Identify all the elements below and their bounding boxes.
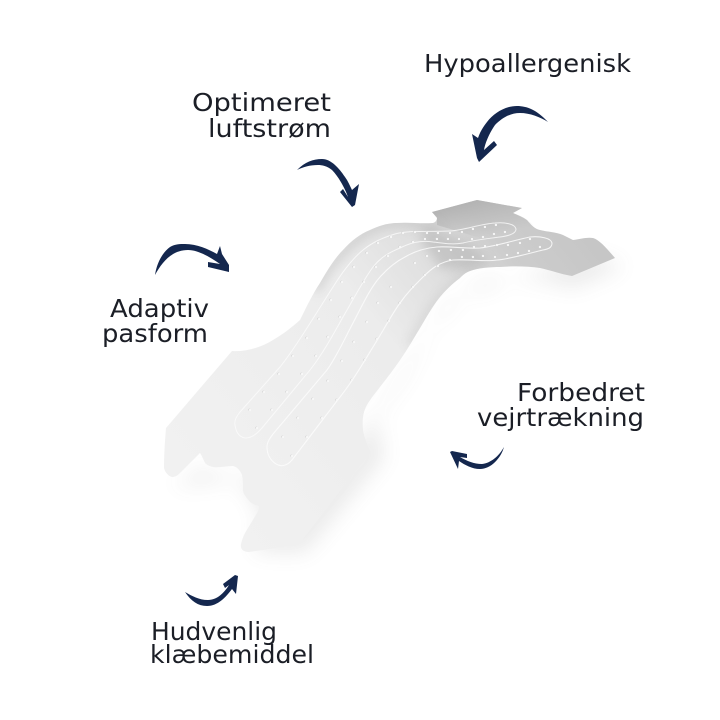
label: Hudvenlig klæbemiddel [150, 617, 314, 669]
arrow: Forbedret vejrtrækning [450, 447, 504, 469]
label: Forbedret vejrtrækning: Forbedret [517, 378, 645, 407]
label: Hudvenlig klæbemiddel: klæbemiddel [150, 640, 314, 669]
label: Optimeret luftstrøm [192, 88, 331, 143]
breathable channel one [235, 223, 516, 438]
label: Optimeret luftstrøm: luftstrøm [208, 114, 331, 143]
product: adhesive strip [164, 200, 615, 552]
label: Adaptiv pasform: pasform [102, 319, 208, 348]
arrow: Adaptiv pasform [155, 244, 229, 275]
fold shading [315, 222, 490, 345]
label: Hypoallergenisk: Hypoallergenisk [424, 49, 632, 78]
ventilation pores [249, 225, 540, 456]
label: Optimeret luftstrøm: Optimeret [192, 88, 331, 117]
arrow: Hudvenlig klæbemiddel [185, 575, 238, 606]
strip body [164, 200, 615, 552]
strip end tab shading [432, 200, 540, 238]
breathable channel two [267, 237, 552, 466]
arrow: Optimeret luftstrøm [297, 159, 359, 207]
label: Adaptiv pasform [102, 294, 209, 348]
label: Adaptiv pasform: Adaptiv [110, 294, 209, 323]
arrow: Hypoallergenisk [472, 106, 548, 162]
label: Forbedret vejrtrækning: vejrtrækning [477, 403, 644, 432]
label: Hudvenlig klæbemiddel: Hudvenlig [151, 617, 277, 646]
label: Forbedret vejrtrækning [477, 378, 645, 432]
shadow under strip [172, 255, 625, 553]
